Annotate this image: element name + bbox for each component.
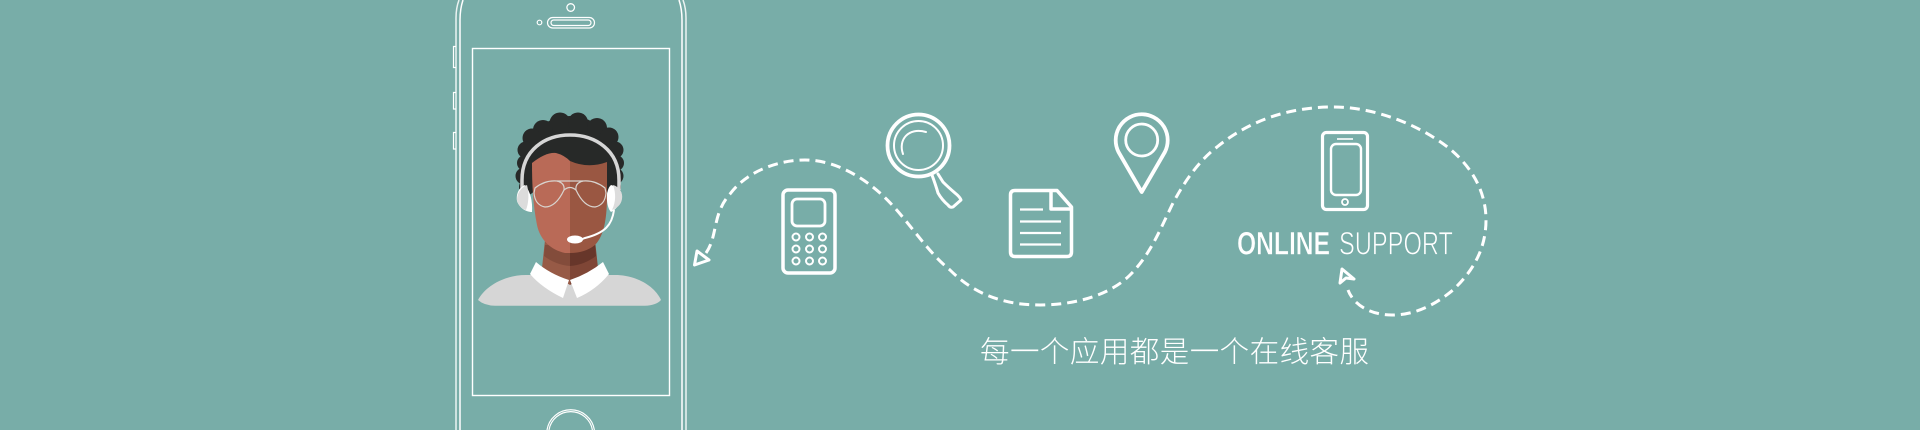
label: online support: ONLINE <box>1237 226 1330 262</box>
label: online support: SUPPORT <box>1339 226 1453 262</box>
arrow: route end near phone <box>694 251 709 265</box>
phone outline <box>454 0 686 430</box>
hair <box>516 112 624 210</box>
dashed route <box>706 107 1486 315</box>
icon: smartphone <box>1322 132 1368 210</box>
glasses <box>534 181 606 207</box>
collar <box>530 262 569 298</box>
face <box>532 153 570 253</box>
icon: magnifying glass <box>888 114 961 207</box>
headset <box>517 135 622 244</box>
icon: keypad phone <box>783 190 835 273</box>
agent portrait <box>478 112 661 306</box>
icon: document <box>1010 190 1072 256</box>
icon: map pin <box>1116 114 1168 192</box>
neck <box>542 240 570 285</box>
label: online support <box>1237 226 1453 262</box>
shoulders <box>478 275 661 306</box>
arrow: route start near label <box>1340 269 1354 283</box>
tagline: 每一个应用都是一个在线客服 <box>980 336 1369 369</box>
